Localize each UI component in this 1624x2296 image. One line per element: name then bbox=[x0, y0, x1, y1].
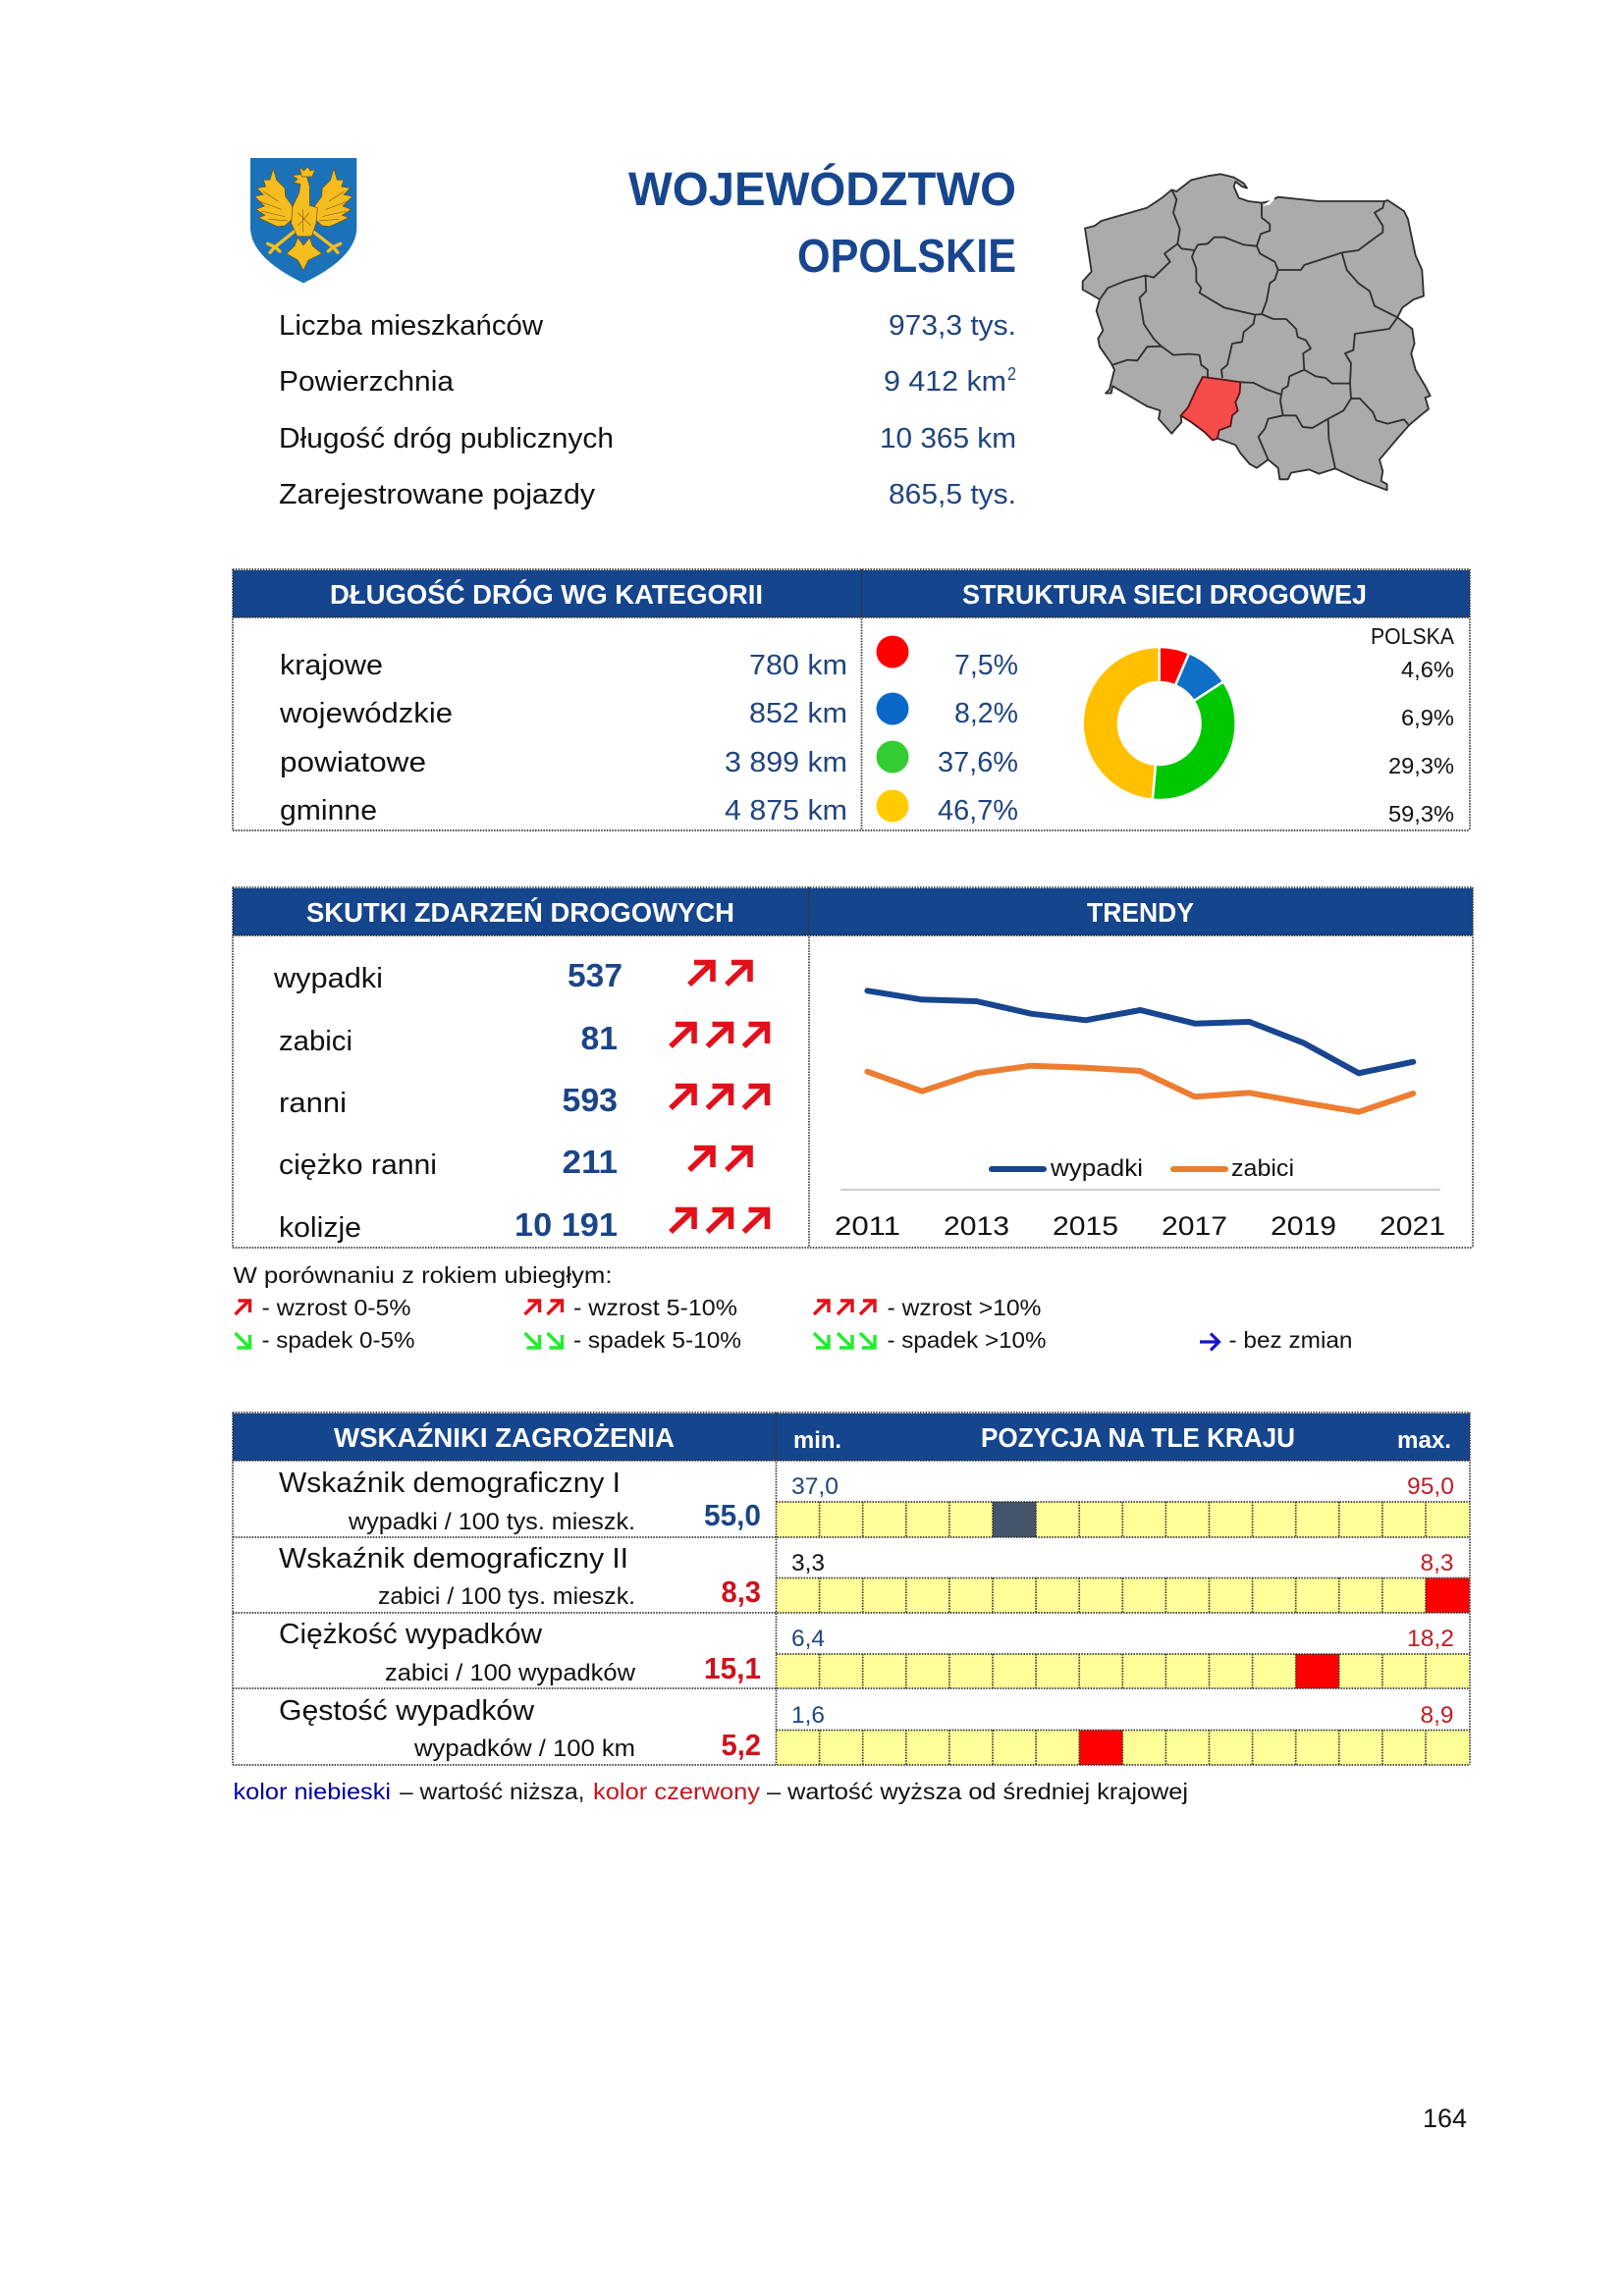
basic facts list: Liczba mieszkańców bbox=[279, 310, 543, 342]
road categories list: krajowe bbox=[280, 650, 383, 681]
colour key note: – wartość wyższa od średniej krajowej bbox=[767, 1779, 1188, 1804]
basic facts list: 10 365 km bbox=[880, 423, 1016, 454]
arrow legend bbox=[234, 1262, 1353, 1353]
basic facts list: 865,5 tys. bbox=[889, 479, 1016, 510]
effects list: kolizje bbox=[279, 1212, 361, 1244]
Poland comparison column: POLSKA bbox=[1371, 623, 1455, 649]
basic facts list: 9 412 km bbox=[884, 366, 1006, 398]
indicator row: severity: zabici / 100 wypadków bbox=[385, 1660, 635, 1686]
header bar: hazard indicators: POZYCJA NA TLE KRAJU bbox=[981, 1422, 1295, 1453]
indicator row: density: wypadków / 100 km bbox=[413, 1735, 635, 1762]
header bar: road tables: DŁUGOŚĆ DRÓG WG KATEGORII bbox=[330, 579, 763, 610]
effects list bbox=[273, 958, 623, 1244]
indicator row: severity: 18,2 bbox=[1407, 1626, 1454, 1652]
line chart: trends: wypadki bbox=[1050, 1155, 1143, 1182]
indicator row: density bbox=[279, 1695, 1453, 1762]
road categories list: 780 km bbox=[749, 650, 847, 681]
line chart: trends: 2019 bbox=[1271, 1211, 1336, 1241]
line chart: trends: zabici bbox=[1231, 1155, 1294, 1182]
effects list: 81 bbox=[581, 1021, 618, 1057]
indicator row: demographic II: 8,3 bbox=[721, 1575, 761, 1609]
line chart: trends: 2011 bbox=[835, 1211, 900, 1241]
donut chart bbox=[1083, 647, 1236, 800]
indicator row: demographic I: wypadki / 100 tys. mieszk. bbox=[348, 1509, 635, 1535]
header bar: hazard indicators: WSKAŹNIKI ZAGROŻENIA bbox=[334, 1422, 675, 1453]
road categories list: 852 km bbox=[749, 698, 847, 729]
arrow legend: - wzrost 5-10% bbox=[573, 1295, 737, 1320]
indicator row: demographic I: 37,0 bbox=[791, 1473, 839, 1500]
arrow legend: - wzrost 0-5% bbox=[261, 1295, 411, 1320]
line chart: trends: 2015 bbox=[1053, 1211, 1118, 1241]
indicator row: severity: Ciężkość wypadków bbox=[279, 1619, 543, 1650]
line chart: trends bbox=[835, 990, 1445, 1241]
header bar: road tables bbox=[233, 570, 1470, 617]
line chart: trends: 2013 bbox=[944, 1211, 1009, 1241]
map of Poland with Opolskie highlighted bbox=[1083, 174, 1431, 490]
Poland comparison column: 59,3% bbox=[1388, 801, 1454, 827]
legend dots and percentages: 8,2% bbox=[954, 698, 1018, 729]
road categories list bbox=[279, 650, 847, 827]
legend dots and percentages: 7,5% bbox=[954, 650, 1018, 681]
header bar: hazard indicators bbox=[233, 1414, 1470, 1461]
arrow legend: - bez zmian bbox=[1229, 1327, 1353, 1353]
panel: road length and network structure bbox=[233, 569, 1470, 830]
Poland comparison column: 4,6% bbox=[1401, 657, 1454, 682]
line chart: trends: 2021 bbox=[1380, 1211, 1445, 1241]
indicator row: demographic I: 55,0 bbox=[704, 1498, 761, 1532]
basic facts list: Powierzchnia bbox=[279, 366, 454, 398]
effects list: ranni bbox=[279, 1088, 347, 1119]
indicator row: demographic II: 3,3 bbox=[791, 1550, 825, 1576]
indicator row: severity: 6,4 bbox=[791, 1626, 825, 1652]
header bar: effects and trends: TRENDY bbox=[1087, 897, 1194, 928]
map region: Opolskie bbox=[1181, 377, 1240, 440]
road categories list: 3 899 km bbox=[725, 747, 847, 778]
position scales bbox=[776, 1502, 1470, 1765]
legend dots and percentages: 37,6% bbox=[938, 747, 1018, 778]
trend arrows bbox=[671, 962, 768, 1232]
effects list: zabici bbox=[279, 1026, 352, 1057]
line chart: trends: 2017 bbox=[1162, 1211, 1227, 1241]
indicator row: demographic I: Wskaźnik demograficzny I bbox=[279, 1468, 621, 1499]
page number: 164 bbox=[1423, 2104, 1467, 2133]
effects list: 10 191 bbox=[514, 1207, 618, 1244]
effects list: ciężko ranni bbox=[279, 1149, 437, 1181]
indicator row: severity bbox=[279, 1619, 1454, 1686]
header bar: effects and trends bbox=[233, 888, 1473, 935]
indicator row: density: 5,2 bbox=[721, 1728, 761, 1762]
colour key note: – wartość niższa, bbox=[400, 1779, 585, 1804]
Poland comparison column bbox=[1371, 623, 1455, 827]
legend dots and percentages: 46,7% bbox=[938, 795, 1018, 827]
header bar: road tables: STRUKTURA SIECI DROGOWEJ bbox=[962, 579, 1367, 610]
road categories list: 4 875 km bbox=[725, 795, 847, 827]
Poland comparison column: 6,9% bbox=[1401, 705, 1454, 730]
arrow legend: - spadek >10% bbox=[888, 1327, 1047, 1353]
effects list: 537 bbox=[568, 958, 623, 994]
arrow legend: - wzrost >10% bbox=[888, 1295, 1042, 1320]
title bbox=[628, 162, 1016, 283]
basic facts list: Zarejestrowane pojazdy bbox=[279, 479, 596, 510]
indicator row: density: 1,6 bbox=[791, 1702, 825, 1729]
basic facts list: Długość dróg publicznych bbox=[279, 423, 614, 454]
basic facts list: 973,3 tys. bbox=[889, 310, 1016, 342]
colour key note: kolor niebieski bbox=[234, 1779, 391, 1804]
indicator row: density: 8,9 bbox=[1420, 1702, 1453, 1729]
panel: road accident effects and trends bbox=[233, 887, 1473, 1248]
basic facts list: 2 bbox=[1007, 364, 1016, 384]
colour key note: kolor czerwony bbox=[593, 1779, 760, 1804]
basic facts list bbox=[279, 310, 1016, 510]
indicator row: demographic II: Wskaźnik demograficzny II bbox=[279, 1543, 628, 1575]
indicator row: demographic II bbox=[279, 1543, 1453, 1610]
title: OPOLSKIE bbox=[797, 230, 1016, 283]
effects list: 211 bbox=[562, 1145, 618, 1181]
indicator row: density: Gęstość wypadków bbox=[279, 1695, 535, 1727]
panel: hazard indicators bbox=[233, 1413, 1470, 1765]
indicator row: demographic I: 95,0 bbox=[1407, 1473, 1454, 1500]
Poland comparison column: 29,3% bbox=[1388, 753, 1454, 778]
road categories list: wojewódzkie bbox=[279, 698, 453, 729]
arrow legend: W porównaniu z rokiem ubiegłym: bbox=[234, 1262, 613, 1288]
arrow legend: - spadek 0-5% bbox=[261, 1327, 415, 1353]
header bar: hazard indicators: max. bbox=[1397, 1427, 1451, 1454]
effects list: wypadki bbox=[273, 963, 383, 994]
indicator row: demographic II: 8,3 bbox=[1420, 1550, 1453, 1576]
icon: coat of arms of Opole voivodeship bbox=[250, 158, 356, 283]
colour key note bbox=[234, 1779, 1188, 1804]
arrow legend: - spadek 5-10% bbox=[573, 1327, 741, 1353]
indicator row: demographic II: zabici / 100 tys. mieszk. bbox=[378, 1583, 635, 1610]
indicator row: demographic I bbox=[279, 1468, 1454, 1535]
header bar: effects and trends: SKUTKI ZDARZEŃ DROGOWYCH bbox=[306, 897, 734, 928]
legend dots and percentages bbox=[876, 636, 1018, 827]
road categories list: gminne bbox=[280, 795, 377, 827]
title: WOJEWÓDZTWO bbox=[628, 162, 1016, 216]
header bar: hazard indicators: min. bbox=[793, 1427, 841, 1454]
road categories list: powiatowe bbox=[280, 747, 426, 778]
effects list: 593 bbox=[562, 1083, 618, 1119]
indicator row: severity: 15,1 bbox=[704, 1651, 761, 1685]
